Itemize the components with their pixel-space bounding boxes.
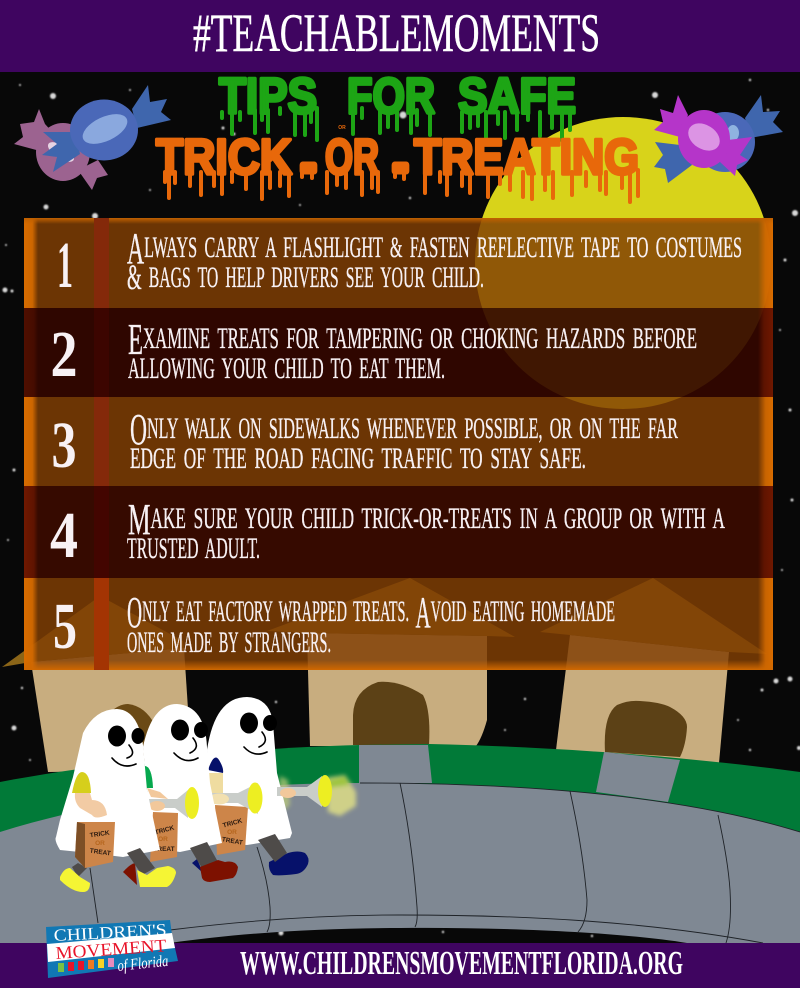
flashlight beams	[277, 775, 356, 816]
tip 1 text	[127, 224, 742, 297]
ghost 3 far flashlight	[277, 775, 332, 807]
ghost 1 arm	[72, 772, 107, 818]
ghost 1 bag	[75, 822, 115, 868]
ghost 2 bag: TRICK	[154, 825, 175, 837]
house: right	[540, 578, 767, 763]
ghost 1	[56, 709, 176, 892]
ghost 1 front leg and foot	[127, 848, 176, 887]
ghost 3 arm and flashlight	[208, 758, 262, 814]
logo: of Florida	[117, 953, 169, 975]
footer bar	[0, 943, 800, 988]
candy: blue left	[42, 85, 171, 172]
candy: purple right	[654, 95, 752, 176]
ghost 1 body	[56, 709, 160, 857]
title	[156, 68, 639, 202]
title line: tips for safe: SAFE	[458, 68, 576, 124]
tip 4 text: M	[128, 495, 150, 544]
ghost 3 legs	[258, 834, 287, 862]
header bar	[0, 0, 800, 72]
title line: tips for safe	[219, 68, 576, 142]
tip 1 text: &	[127, 257, 142, 297]
ghost 1 bag: TREAT	[89, 848, 111, 857]
tip 2 text	[128, 315, 697, 385]
house: middle	[267, 578, 515, 746]
ghost 3 bag: TREAT	[221, 836, 243, 847]
tip 4 text: TRUSTED ADULT.	[127, 532, 260, 565]
number 5: 5	[53, 590, 77, 663]
ghost 3	[192, 697, 332, 875]
house: left	[2, 596, 192, 772]
ghost 3 face	[240, 712, 277, 754]
title line: trick-or-treating: TREATING	[414, 129, 639, 185]
number 4: 4	[50, 499, 78, 572]
tip row 2 background	[24, 308, 773, 397]
tip 2 text: E	[128, 315, 143, 364]
tip 3 text	[130, 405, 678, 475]
ghost 1 bag: TRICK	[89, 830, 110, 839]
tip row 5 background	[24, 578, 773, 670]
logo: CHILDREN'S	[53, 920, 167, 945]
small or: OR	[338, 125, 346, 131]
tip row 1 background	[24, 218, 773, 308]
ghost 3 body	[207, 697, 292, 845]
candy: pink, behind	[14, 109, 108, 190]
ghost 1 bag: OR	[95, 840, 105, 847]
tip row 4 background	[24, 486, 773, 578]
ghost 2 bag	[150, 812, 178, 862]
title line: trick-or-treating: TRICK	[156, 129, 292, 185]
ghost 2	[123, 704, 238, 885]
tip 2	[50, 315, 697, 391]
logo	[46, 920, 178, 978]
panel edge glows	[24, 218, 773, 670]
candy: blue right, behind	[654, 95, 783, 183]
title line: trick-or-treating: -	[301, 136, 316, 192]
moon	[475, 117, 771, 409]
title line: trick-or-treating: -	[393, 136, 408, 192]
tip 1	[57, 224, 742, 302]
tip 1: 1	[57, 229, 73, 302]
ghost 2 body	[143, 704, 222, 852]
header text: #TEACHABLEMOMENTS	[193, 3, 600, 63]
ground: grass strip	[0, 744, 800, 845]
ghost 3 bag: TRICK	[222, 818, 243, 830]
ghost 2 front leg and foot	[190, 842, 238, 882]
tip 4	[50, 495, 725, 572]
ghost 2 bag: OR	[158, 836, 168, 843]
tip row 3 background	[24, 397, 773, 486]
tip 4 text	[127, 495, 725, 565]
tip 3	[52, 405, 678, 482]
tip 5 text	[127, 588, 615, 659]
title line: tips for safe: FOR	[347, 68, 435, 124]
tip 5 text: ONES MADE BY STRANGERS.	[127, 626, 331, 659]
red vertical stripe	[94, 218, 109, 670]
ghost 1 leg and foot	[72, 863, 87, 877]
tip 1 text: A	[127, 224, 144, 273]
ghost 2 back foot	[123, 863, 137, 885]
number 2: 2	[50, 318, 78, 391]
tip 5	[53, 588, 615, 663]
logo: MOVEMENT	[55, 935, 167, 963]
ghost 2 arm and flashlight	[143, 766, 199, 819]
number 3: 3	[52, 409, 76, 482]
title line: tips for safe: TIPS	[219, 68, 317, 124]
ghost 3 bag	[215, 805, 248, 855]
ghost 1 face	[108, 726, 144, 766]
title line: trick-or-treating: OR	[325, 129, 379, 185]
tip 5 text: O	[127, 588, 142, 637]
tip 5 text: A	[415, 588, 431, 637]
ghost 2 face	[171, 720, 208, 761]
ghost 3 back foot and front foot	[269, 852, 309, 875]
tip 1 text: BAGS TO HELP DRIVERS SEE YOUR CHILD.	[142, 261, 484, 294]
tip 3 text: O	[130, 405, 147, 454]
tip 5 text: NLY EAT FACTORY WRAPPED TREATS.	[142, 595, 415, 628]
tip 2 text: ALLOWING YOUR CHILD TO EAT THEM.	[128, 352, 445, 385]
ghost 3 bag: OR	[227, 829, 237, 836]
ground: sidewalk	[0, 745, 800, 943]
title line: trick-or-treating	[156, 129, 639, 202]
ghost 2 bag: TREAT	[153, 846, 175, 853]
